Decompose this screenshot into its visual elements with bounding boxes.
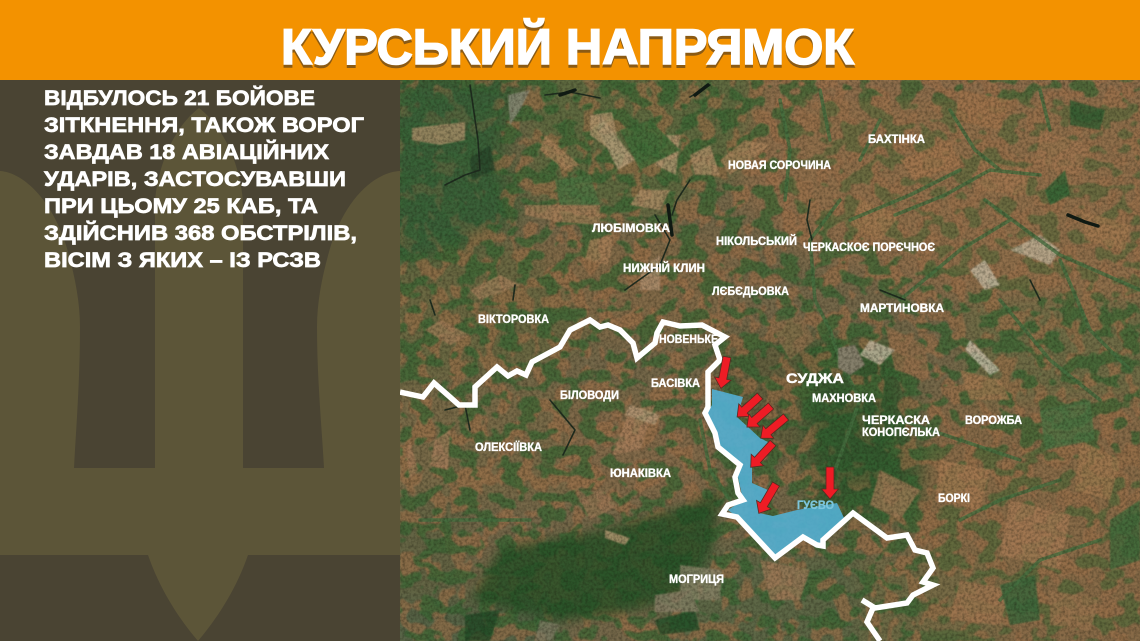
arrow 3 <box>746 402 774 428</box>
map labels: settlements: ЧЕРКАСКОЄ ПОРЄЧНОЄ <box>803 242 935 254</box>
panel: left text panel with trident <box>0 80 400 641</box>
map: field texture <box>400 80 1140 641</box>
map labels: settlements: БІЛОВОДИ <box>560 390 619 402</box>
border line <box>400 320 933 641</box>
map labels: settlements: ВІКТОРОВКА <box>478 314 549 326</box>
text block: battle summary: ПРИ ЦЬОМУ 25 КАБ, ТА <box>44 194 318 218</box>
map labels: settlements: МАХНОВКА <box>812 393 876 405</box>
map labels: settlements: ОЛЕКСІЇВКА <box>475 441 542 454</box>
panel: satellite map <box>380 60 1140 641</box>
text block: battle summary: ЗАВДАВ 18 АВІАЦІЙНИХ <box>44 139 330 164</box>
map labels: settlements: НИЖНІЙ КЛИН <box>623 262 705 275</box>
map labels: settlements: БАСІВКА <box>651 378 700 390</box>
map labels: settlements: ЛЄБЄДЬОВКА <box>712 286 789 298</box>
text block: battle summary: ВІСІМ З ЯКИХ – ІЗ РСЗВ <box>44 248 321 272</box>
map: streams and green ravines <box>420 85 1140 600</box>
map: Sudzha town <box>838 345 865 375</box>
text block: battle summary: ЗДІЙСНИВ 368 ОБСТРІЛІВ, <box>44 220 357 245</box>
arrow 7 <box>822 467 838 499</box>
map labels: settlements: БОРКІ <box>938 493 970 505</box>
arrow 6 <box>756 482 780 514</box>
text block: battle summary: ЗІТКНЕННЯ, ТАКОЖ ВОРОГ <box>44 113 364 137</box>
map: regional tone overlays <box>400 90 1140 641</box>
area: occupied zone shading <box>707 389 845 558</box>
arrow 1 <box>714 356 732 389</box>
text block: battle summary: УДАРІВ, ЗАСТОСУВАВШИ <box>44 167 346 191</box>
title: КУРСЬКИЙ НАПРЯМОК <box>281 18 854 75</box>
arrow 5 <box>750 440 776 468</box>
title: КУРСЬКИЙ НАПРЯМОК <box>281 21 854 78</box>
arrow 4 <box>760 414 789 439</box>
map labels: settlements: ВОРОЖБА <box>965 415 1022 427</box>
icon: trident watermark <box>0 108 400 641</box>
map: individual fields <box>405 90 1140 641</box>
map labels: settlements: ГУЄВО <box>797 500 834 512</box>
panel: orange title banner <box>0 0 1140 80</box>
map labels: settlements: НОВЕНЬКЕ <box>659 334 718 346</box>
map labels: settlements: КОНОПЄЛЬКА <box>862 427 940 439</box>
map labels: settlements <box>475 134 1022 586</box>
arrow 2 <box>736 392 763 418</box>
map labels: settlements: МАРТИНОВКА <box>860 303 944 315</box>
map: large colour zones <box>380 60 1140 641</box>
map labels: settlements: ЮНАКІВКА <box>610 468 671 480</box>
text block: battle summary: ВІДБУЛОСЬ 21 БОЙОВЕ <box>44 85 315 110</box>
map labels: settlements: БАХТІНКА <box>868 134 925 146</box>
map labels: settlements: ЧЕРКАСКА <box>862 415 930 427</box>
map labels: settlements: ЛЮБІМОВКА <box>592 223 670 235</box>
text block: battle summary <box>44 85 364 272</box>
map labels: settlements: НІКОЛЬСЬКИЙ <box>716 235 797 248</box>
map: fine grain <box>400 80 1140 641</box>
map labels: settlements: СУДЖА <box>786 370 844 386</box>
map labels: settlements: МОГРИЦЯ <box>669 574 724 586</box>
map labels: settlements: НОВАЯ СОРОЧИНА <box>728 160 831 172</box>
